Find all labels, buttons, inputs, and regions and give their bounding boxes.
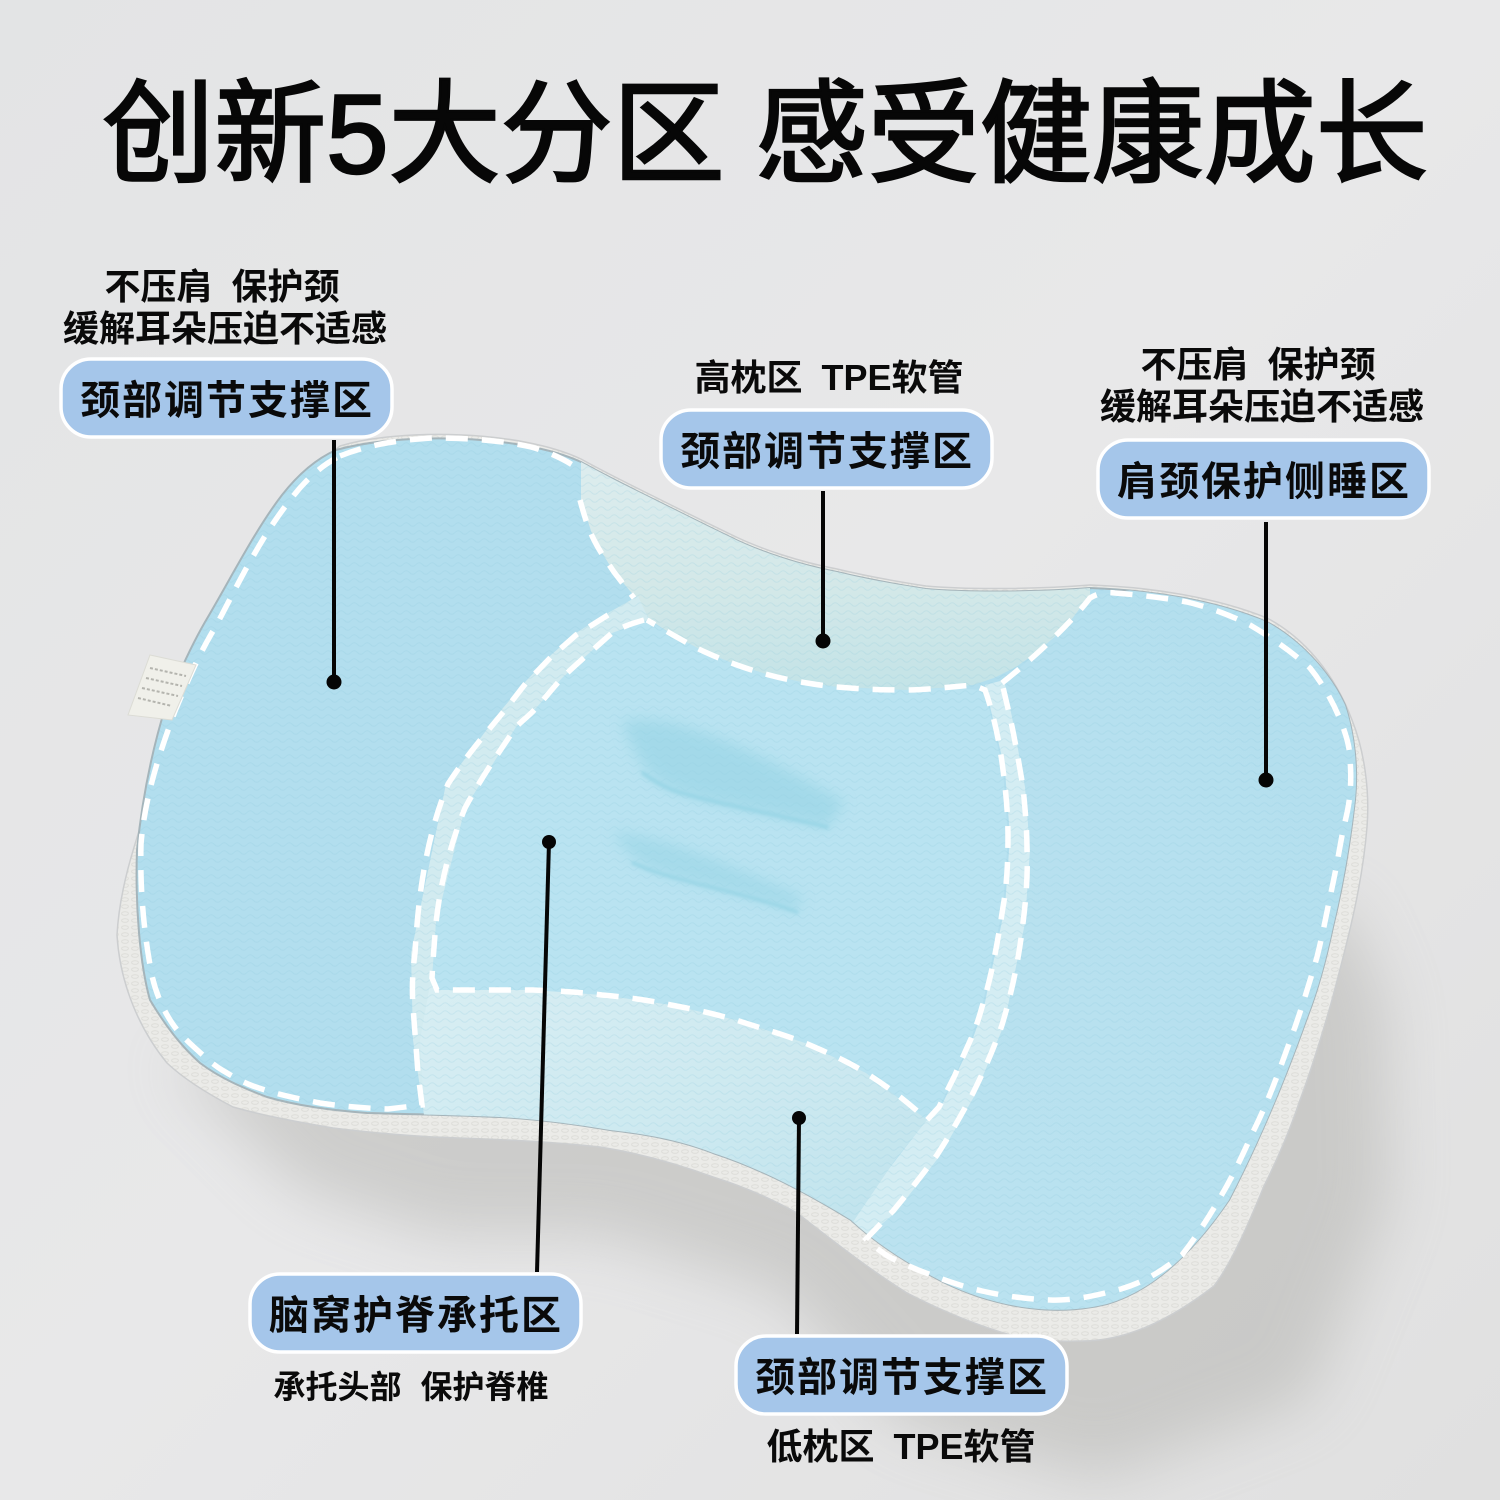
mesh texture [411, 462, 1356, 1310]
caption: 不压肩 保护颈 [1140, 344, 1376, 385]
outer mesh texture [117, 434, 1368, 1341]
pill text: 颈部调节支撑区 [680, 430, 974, 474]
callout: occipital support zone [250, 835, 581, 1405]
pointer dot [816, 634, 830, 648]
pointer dot [792, 1111, 806, 1125]
zone base: left and right sides [137, 438, 1356, 1310]
callout: high pillow zone [661, 357, 992, 648]
pill label [250, 1274, 581, 1352]
pillow outer mesh edge [117, 434, 1368, 1341]
fabric tag [128, 655, 196, 720]
pill text: 颈部调节支撑区 [755, 1356, 1049, 1400]
pointer line [1264, 522, 1268, 780]
pointer dot [542, 835, 556, 849]
pill text: 脑窝护脊承托区 [269, 1294, 563, 1338]
pill label [61, 359, 392, 437]
caption: 承托头部 保护脊椎 [274, 1369, 548, 1405]
pill text: 肩颈保护侧睡区 [1117, 460, 1411, 504]
centre dimple upper crease [643, 773, 827, 827]
centre dimple lower crease [633, 863, 797, 912]
pill text: 颈部调节支撑区 [80, 379, 374, 423]
pointer line [821, 491, 825, 641]
pointer line [537, 842, 549, 1272]
caption: 不压肩 保护颈 [104, 266, 340, 307]
zone: low pillow (bottom centre) [420, 985, 927, 1225]
pointer line [332, 440, 336, 682]
caption: 缓解耳朵压迫不适感 [63, 308, 387, 349]
centre dimple lower [612, 832, 802, 912]
pill label [1098, 440, 1429, 518]
stitching: left zone [141, 438, 634, 1109]
stitching: centre zone [432, 620, 1008, 1120]
pill label [736, 1336, 1067, 1414]
pillow shadow [170, 900, 1390, 1480]
pillow illustration [117, 430, 1400, 1480]
pointer dot [1258, 772, 1274, 788]
pointer dot [326, 674, 342, 690]
caption: 低枕区 TPE软管 [766, 1426, 1036, 1467]
caption: 高枕区 TPE软管 [694, 357, 964, 398]
centre dimple upper [622, 720, 845, 828]
zone: centre [432, 620, 647, 971]
pill label [661, 410, 992, 488]
callout: top-left neck zone [61, 266, 392, 690]
seam band: left of centre [411, 596, 650, 1115]
zones clipped to the pillow top [411, 462, 1356, 1310]
pointer line [797, 1118, 799, 1334]
caption: 缓解耳朵压迫不适感 [1100, 386, 1424, 427]
title: 创新5大分区 感受健康成长 [102, 72, 1428, 197]
stitching: right zone [866, 593, 1351, 1300]
callout: low pillow zone [736, 1111, 1067, 1467]
zone: high pillow (top centre) [581, 440, 1090, 690]
zone: right side [872, 590, 1356, 1310]
seam band: right of centre [851, 680, 1030, 1240]
callout: right shoulder zone [1098, 344, 1429, 788]
